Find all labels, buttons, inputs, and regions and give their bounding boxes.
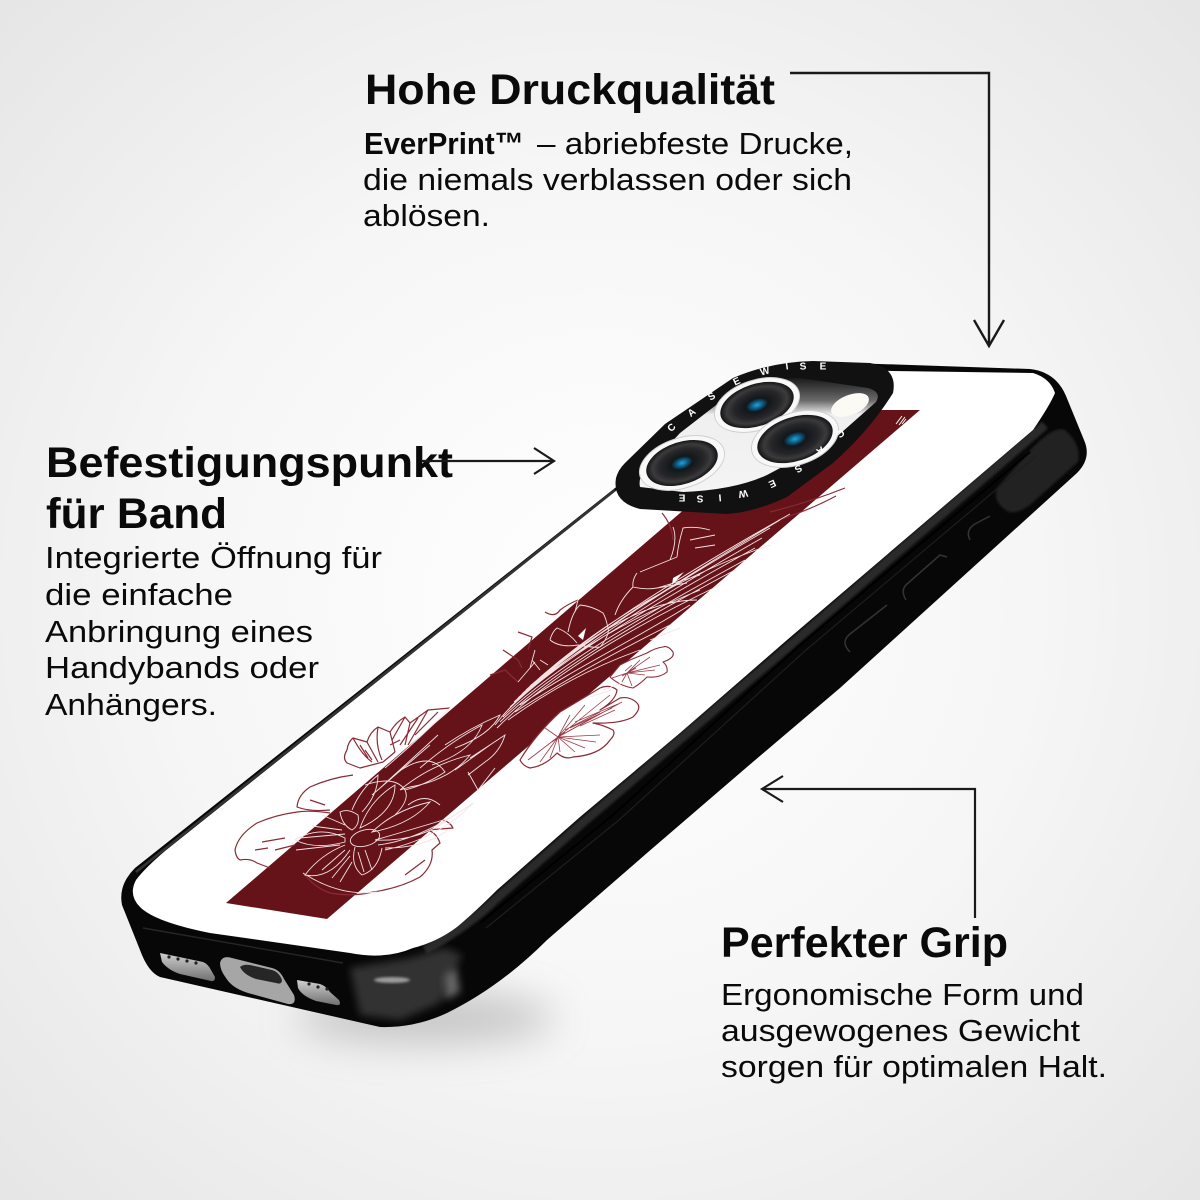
brand ring text	[666, 361, 846, 504]
hibiscus large stamen lines	[528, 695, 622, 762]
camera bumper	[616, 361, 894, 514]
brand ring text: S	[799, 361, 807, 373]
body text: Anbringung eines	[45, 614, 313, 649]
brand ring text: A	[686, 406, 698, 420]
body text: ablösen.	[363, 198, 490, 233]
white line art on band	[295, 514, 790, 893]
glossy corner highlights	[350, 948, 462, 1020]
calla lily two	[615, 527, 715, 615]
callout: print quality	[363, 66, 853, 233]
brand ring text: S	[706, 390, 718, 403]
case screen face	[133, 368, 1055, 956]
lily pads, upper lotus outlines	[235, 488, 845, 895]
arrow: strap attachment	[421, 448, 554, 474]
lens left	[632, 426, 732, 500]
brand ring text: E	[732, 375, 743, 388]
lens top	[707, 368, 807, 442]
brand ring text: I	[785, 361, 789, 373]
brand ring text: W	[759, 365, 772, 379]
charging port	[220, 957, 295, 1004]
body text: ausgewogenes Gewicht	[721, 1013, 1080, 1048]
body text: die niemals verblassen oder sich	[363, 162, 852, 197]
heading: Perfekter Grip	[721, 919, 1008, 967]
stem fan	[495, 514, 790, 728]
brand ring text: W	[737, 487, 749, 499]
body text: sorgen für optimalen Halt.	[721, 1049, 1107, 1084]
volume button upper	[903, 555, 947, 600]
body text: Integrierte Öffnung für	[45, 540, 382, 575]
lower lotus petals	[348, 826, 382, 850]
heading: für Band	[46, 490, 227, 538]
lens right	[744, 400, 846, 478]
speaker grille left	[160, 953, 215, 981]
heading	[46, 439, 453, 538]
heading: Befestigungspunkt	[46, 439, 453, 487]
camera island	[616, 361, 894, 514]
brand ring text: C	[666, 422, 678, 434]
artwork: burgundy band with floral line art	[226, 410, 920, 919]
callout: grip	[721, 919, 1107, 1084]
speaker grille right	[297, 980, 340, 1005]
burgundy band	[226, 410, 920, 919]
mute switch	[968, 516, 990, 540]
arrow: grip	[762, 776, 975, 918]
sprigs on band	[518, 628, 680, 697]
hibiscus large	[520, 686, 639, 768]
phone case	[121, 362, 1087, 1027]
phone drop shadow	[295, 992, 555, 1044]
left edge thin line	[136, 490, 615, 872]
hibiscus small	[610, 647, 673, 688]
body text: Ergonomische Form und	[721, 977, 1084, 1012]
body text	[363, 126, 853, 233]
body text: – abriebfeste Drucke,	[537, 126, 853, 161]
brand ring text: I	[718, 491, 722, 503]
brand ring text: E	[766, 477, 777, 490]
calla lily one	[550, 600, 608, 647]
brand ring text: E	[820, 362, 827, 372]
tiny print mark	[896, 416, 906, 425]
upper lotus petals on band	[372, 708, 505, 795]
case body	[121, 362, 1087, 1027]
arrow: print quality	[790, 73, 1004, 346]
brand ring text: C	[834, 426, 846, 440]
brand ring text: A	[814, 443, 826, 457]
flash	[828, 388, 872, 422]
body text: die einfache	[45, 577, 233, 612]
body text: EverPrint™	[364, 126, 524, 161]
brand ring text: S	[792, 462, 804, 475]
rim shading	[425, 425, 1045, 950]
volume button lower	[845, 605, 887, 652]
brand ring text: S	[696, 492, 704, 504]
front groove line	[143, 928, 343, 963]
callout: strap attachment	[45, 439, 453, 722]
heading: Hohe Druckqualität	[365, 66, 775, 114]
body text	[45, 540, 382, 722]
side grip panel	[996, 429, 1079, 512]
brand ring text: E	[678, 492, 685, 502]
body text	[721, 977, 1107, 1084]
camera opening	[640, 378, 878, 492]
body text: Handybands oder	[45, 650, 319, 685]
body text: Anhängers.	[45, 687, 217, 722]
side groove line	[480, 452, 1030, 923]
hibiscus small stamen lines	[612, 657, 660, 686]
